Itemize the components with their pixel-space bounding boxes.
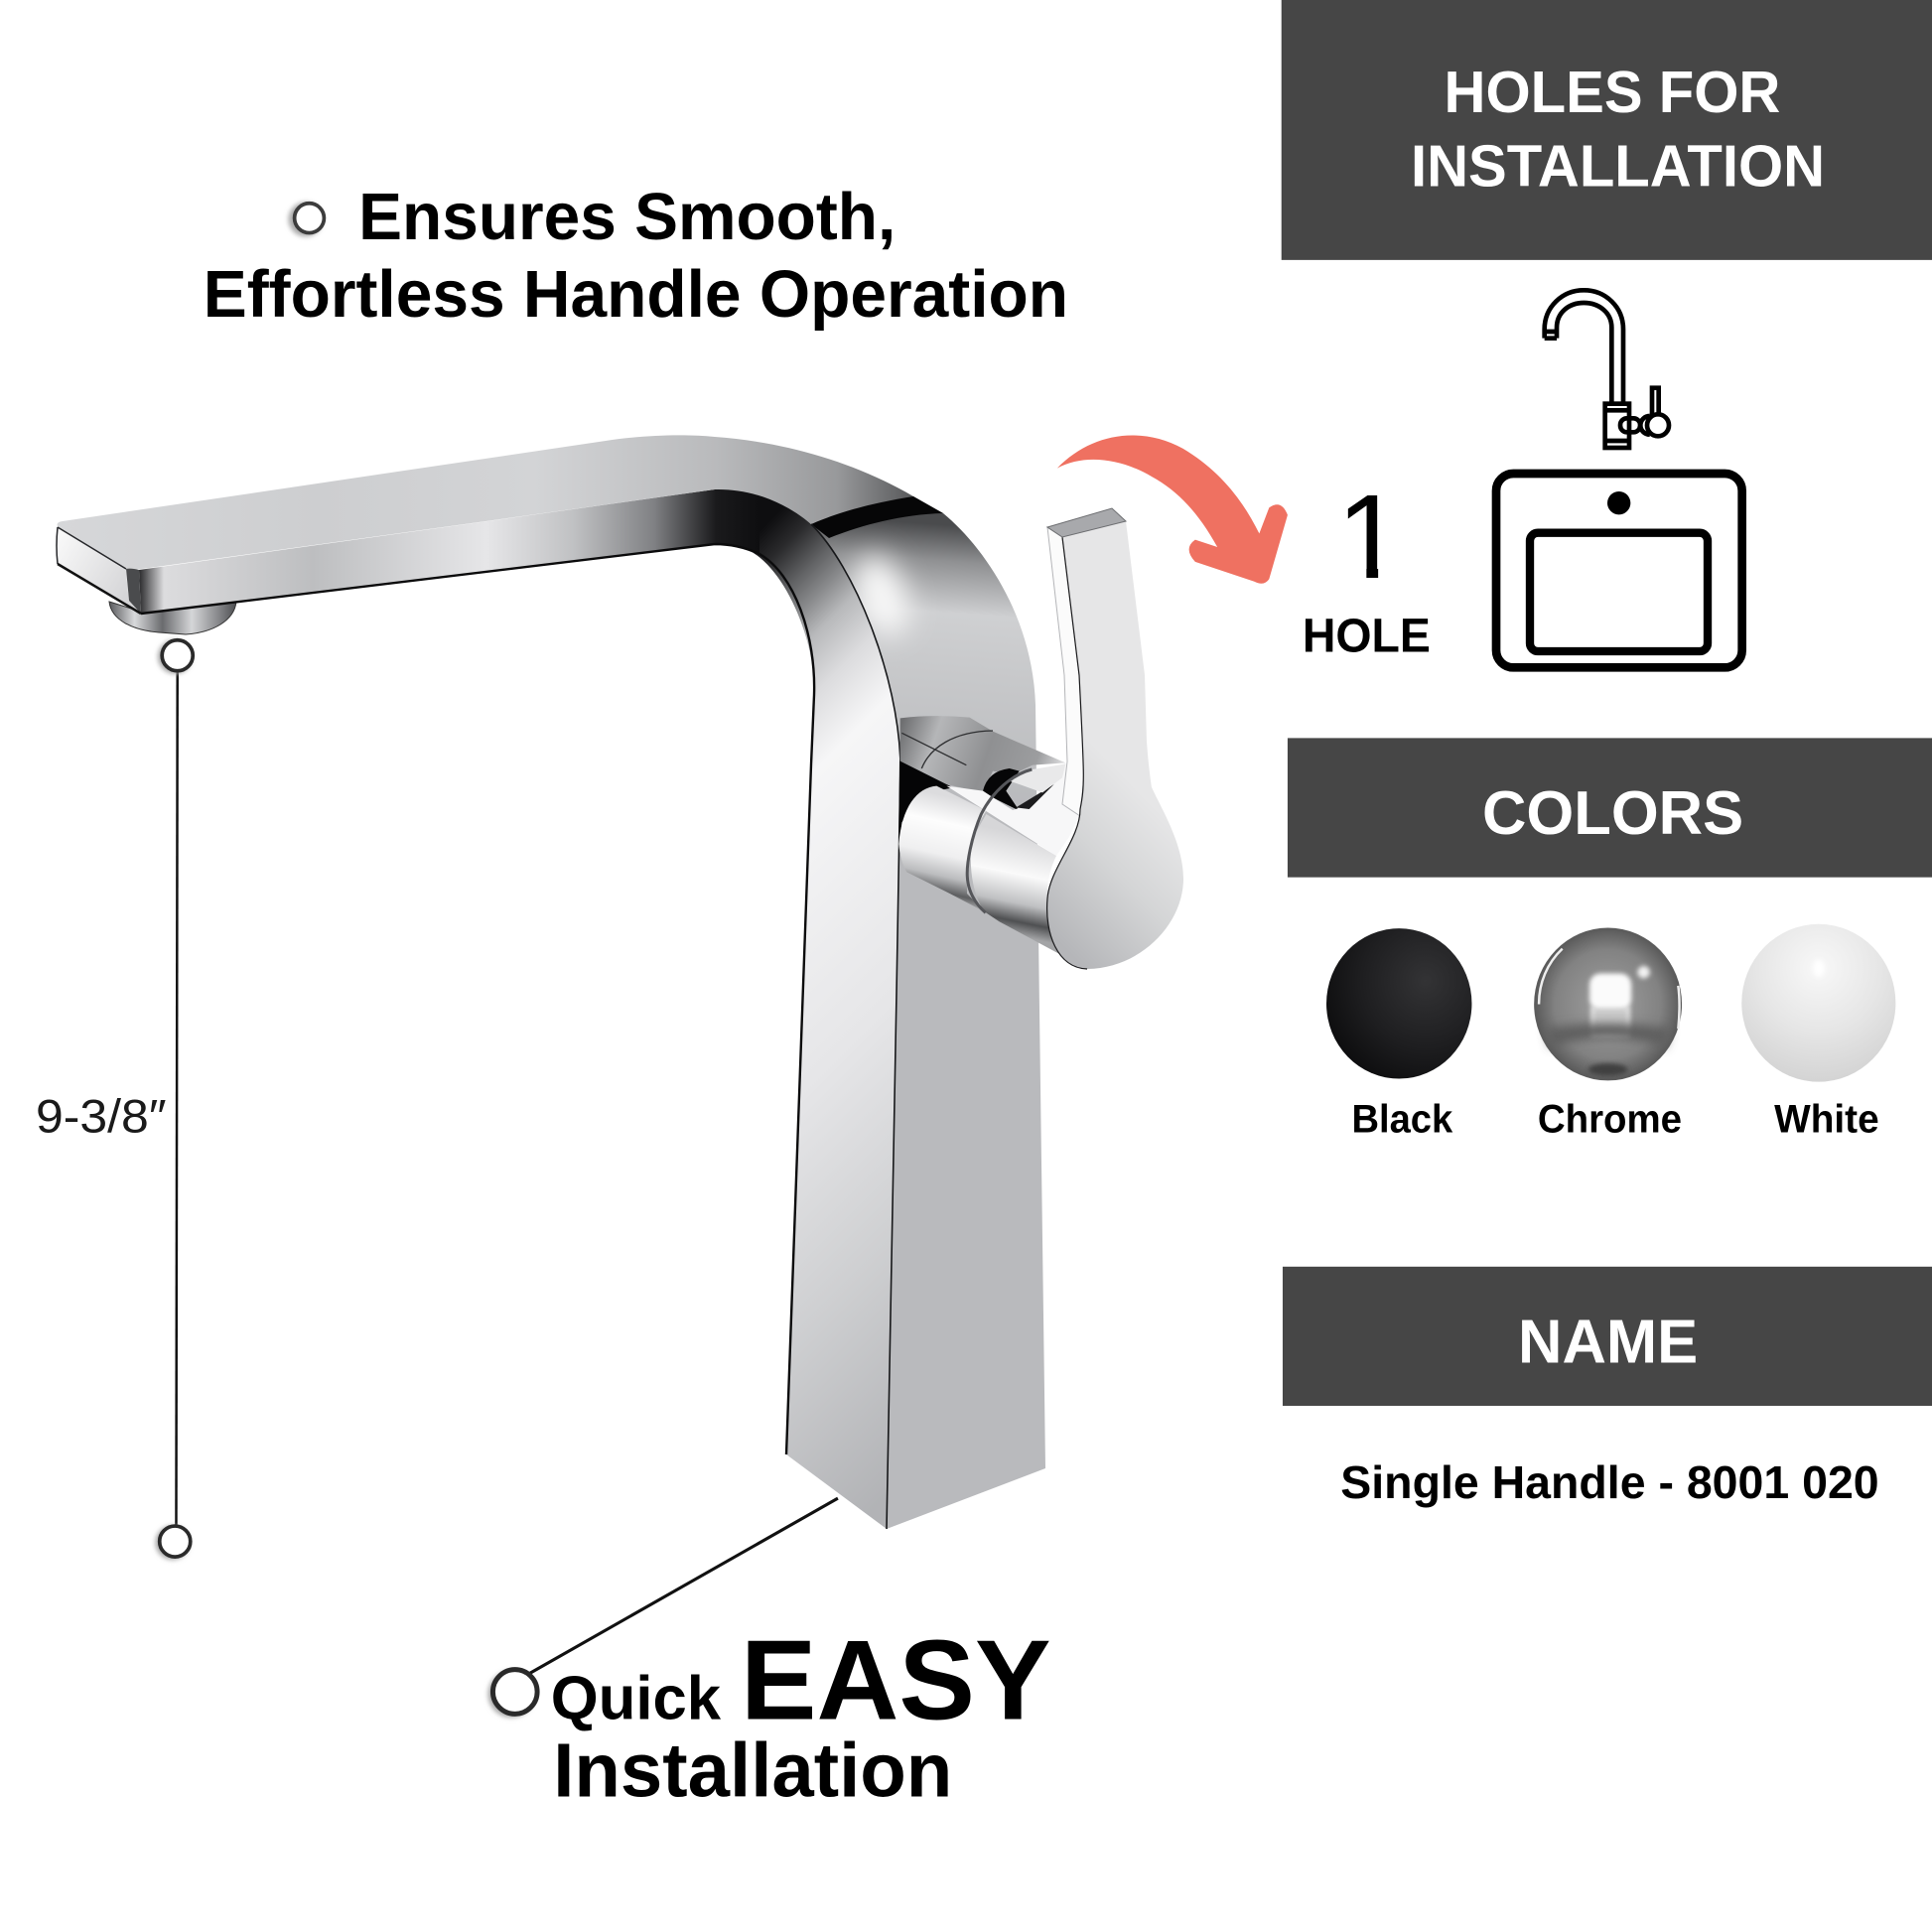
callout: installation leader line and marker xyxy=(487,1498,838,1718)
icon: sink basin xyxy=(1496,474,1742,667)
faucet spout front face xyxy=(139,489,759,614)
swatch: chrome xyxy=(1534,928,1682,1142)
text: hole count: HOLE xyxy=(1303,610,1431,663)
swatch: chrome: Chrome xyxy=(1538,1098,1682,1142)
marker: handle operation bullet xyxy=(288,203,324,236)
text: product name: Single Handle - 8001 020 xyxy=(1340,1456,1879,1508)
faucet right body face xyxy=(811,496,1045,1529)
panel: colors header xyxy=(1288,738,1932,878)
faucet tip xyxy=(57,527,141,614)
faucet column and arch xyxy=(740,490,900,1529)
swatch: black xyxy=(1326,928,1471,1142)
heading: handle operation: Ensures Smooth, xyxy=(358,180,896,254)
upper cartridge xyxy=(900,716,1065,792)
text: hole count: 1 xyxy=(1336,470,1403,604)
cylinder left section xyxy=(898,786,986,911)
panel: colors header: COLORS xyxy=(1482,779,1743,848)
swatch: black: Black xyxy=(1351,1098,1453,1142)
icon: faucet xyxy=(1545,290,1669,448)
text: hole count xyxy=(1305,495,1430,652)
faucet illustration xyxy=(57,435,1183,1529)
text: height measurement: 9-3/8″ xyxy=(36,1090,167,1143)
swatch: white: White xyxy=(1774,1098,1879,1142)
mount shadow xyxy=(898,759,953,861)
heading: handle operation: Effortless Handle Operation xyxy=(204,257,1068,332)
faucet aerator xyxy=(109,602,236,634)
heading: quick easy installation: EASY xyxy=(741,1617,1051,1743)
faucet lever handle xyxy=(1047,508,1183,969)
panel: holes for installation header: INSTALLATION xyxy=(1411,132,1825,199)
dimension: height line and markers xyxy=(155,639,193,1560)
arrow: handle direction xyxy=(1057,436,1288,584)
heading: quick easy installation: Quick xyxy=(551,1664,722,1732)
swatch: white xyxy=(1741,924,1895,1142)
panel: name header: NAME xyxy=(1518,1309,1698,1377)
faucet handle mount xyxy=(898,716,1083,956)
heading: quick easy installation xyxy=(551,1617,1051,1813)
valve gap xyxy=(946,762,1083,856)
heading: quick easy installation: Installation xyxy=(553,1727,952,1813)
collar ring xyxy=(967,769,1032,912)
panel: holes for installation header: HOLES FOR xyxy=(1445,59,1780,125)
cylinder right section xyxy=(971,814,1064,956)
panel: name header xyxy=(1283,1267,1932,1406)
heading: handle operation xyxy=(204,180,1068,332)
panel: holes for installation header xyxy=(1282,0,1932,260)
faucet dark reflection band xyxy=(811,496,943,538)
faucet spout top face xyxy=(58,435,913,570)
icon: faucet and sink xyxy=(1496,290,1742,667)
